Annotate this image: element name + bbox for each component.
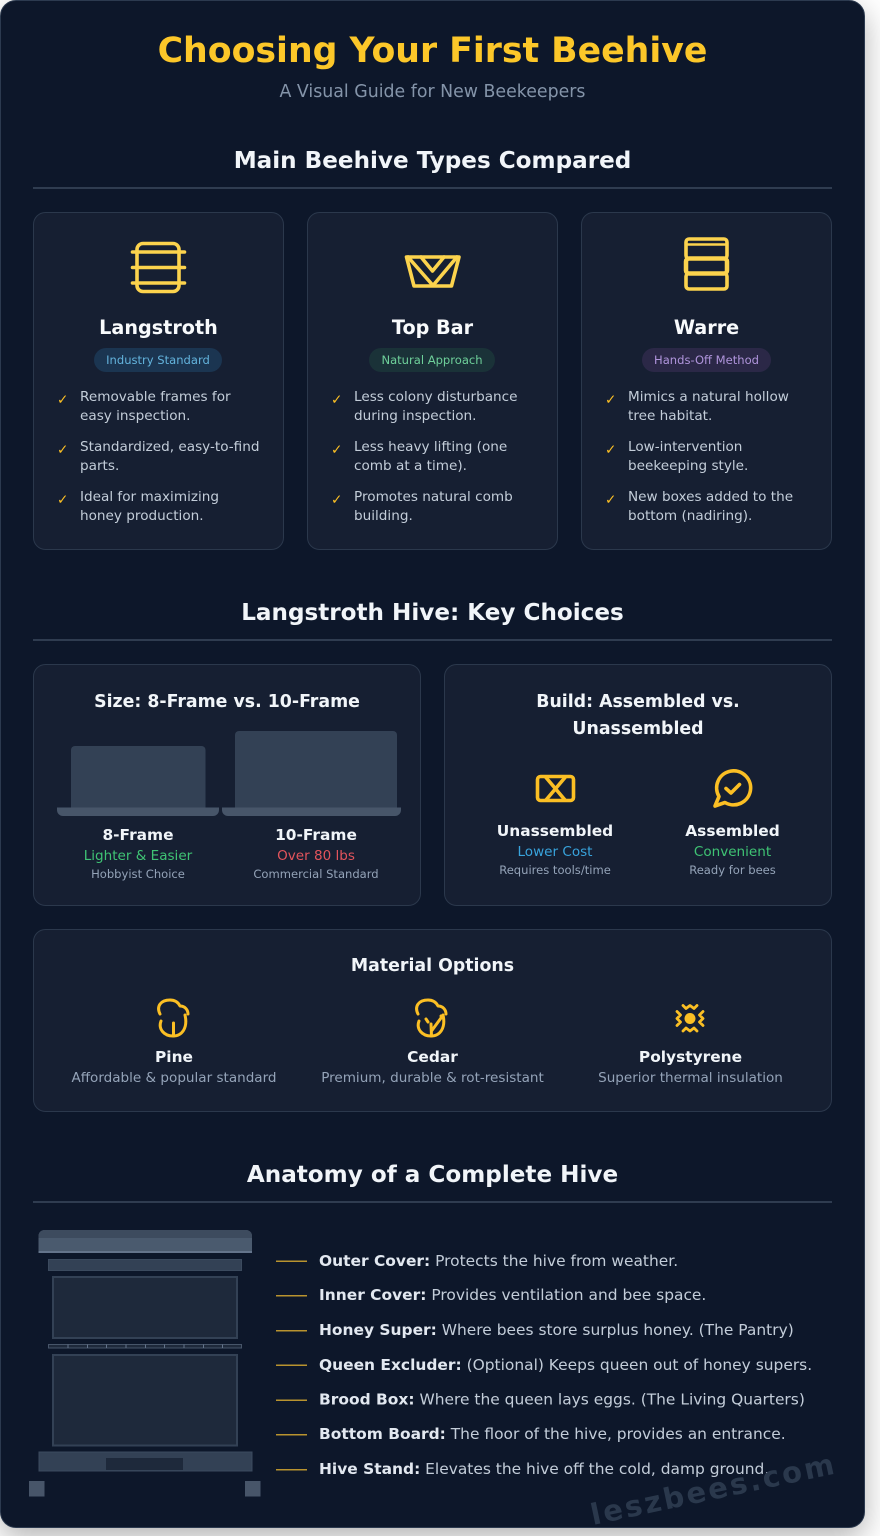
cedar labels: Premium, durable & rot-resistant (321, 1070, 544, 1086)
pine labels: Affordable & popular standard (71, 1070, 277, 1086)
Langstroth bullet list: ✓ (57, 492, 68, 508)
watermark: leszbees.com (587, 1446, 840, 1532)
icon: speech bubble with check (715, 771, 751, 806)
build heading (536, 692, 740, 739)
Warre bullet list: ✓ (605, 442, 616, 458)
Warre bullet list: ✓ (605, 392, 616, 408)
Warre bullet list: beekeeping style. (628, 458, 748, 474)
Top Bar bullet list: ✓ (331, 492, 342, 508)
unassembled labels: Requires tools/time (499, 863, 611, 877)
title: Choosing Your First Beehive (158, 31, 707, 71)
polystyrene labels (598, 1048, 783, 1086)
panel: Warre (582, 212, 832, 550)
honey super (53, 1277, 237, 1338)
diagram: 10-frame box (222, 731, 401, 816)
badge: Hands-Off Method: Hands-Off Method (654, 353, 759, 367)
8-frame labels: Hobbyist Choice (91, 867, 185, 881)
material heading: Material Options (351, 956, 514, 976)
unassembled labels: Lower Cost (517, 844, 593, 860)
assembled labels (685, 822, 780, 877)
Top Bar bullet list: building. (354, 508, 413, 524)
panel: Langstroth (34, 212, 284, 550)
10-frame labels: Commercial Standard (253, 867, 379, 881)
anatomy list (276, 1252, 812, 1478)
Warre bullet list: New boxes added to the (628, 489, 793, 505)
heading: anatomy: Anatomy of a Complete Hive (247, 1162, 618, 1188)
polystyrene labels: Superior thermal insulation (598, 1070, 783, 1086)
Langstroth bullet list: ✓ (57, 392, 68, 408)
Warre bullet list (605, 389, 793, 524)
anatomy list: Bottom Board: The floor of the hive, provides an entrance. (319, 1425, 786, 1443)
size heading: Size: 8-Frame vs. 10-Frame (94, 692, 360, 712)
subtitle: A Visual Guide for New Beekeepers (280, 82, 585, 102)
Warre bullet list: bottom (nadiring). (628, 508, 752, 524)
10-frame labels: 10-Frame (275, 826, 357, 844)
Top Bar bullet list: during inspection. (354, 408, 476, 424)
anatomy list: Brood Box: Where the queen lays eggs. (The Living Quarters) (319, 1390, 805, 1408)
heading: main beehive types: Main Beehive Types Compared (234, 148, 631, 174)
assembled labels: Ready for bees (689, 863, 776, 877)
Langstroth bullet list: ✓ (57, 442, 68, 458)
Top Bar bullet list: ✓ (331, 442, 342, 458)
Top Bar bullet list: Less heavy lifting (one (354, 439, 507, 455)
Top Bar bullet list (331, 389, 517, 524)
Warre bullet list: Mimics a natural hollow (628, 389, 789, 405)
anatomy list: Queen Excluder: (Optional) Keeps queen out of honey supers. (319, 1356, 812, 1374)
badge: Industry Standard: Industry Standard (106, 353, 210, 367)
diagram: 8-frame box (57, 746, 219, 816)
8-frame labels (84, 826, 193, 881)
anatomy list: Honey Super: Where bees store surplus honey. (The Pantry) (319, 1321, 794, 1339)
unassembled labels: Unassembled (497, 822, 613, 840)
diagram: hive anatomy (29, 1230, 260, 1496)
cedar labels (321, 1048, 544, 1086)
panel: material options (34, 930, 832, 1112)
build heading: Unassembled (572, 719, 704, 739)
pine labels: Pine (155, 1048, 193, 1066)
inner cover (48, 1260, 242, 1270)
8-frame labels: Lighter & Easier (84, 848, 193, 864)
icon: flat-pack box (538, 776, 574, 800)
Warre bullet list: Low-intervention (628, 439, 742, 455)
Langstroth bullet list (57, 389, 260, 524)
outer cover (38, 1230, 252, 1253)
assembled labels: Assembled (685, 822, 780, 840)
anatomy list: Inner Cover: Provides ventilation and bee space. (319, 1286, 706, 1304)
panel: Top Bar (308, 212, 558, 550)
panel: size comparison (34, 664, 420, 906)
Langstroth bullet list: Standardized, easy-to-find (80, 439, 260, 455)
Langstroth bullet list: easy inspection. (80, 408, 190, 424)
Langstroth bullet list: honey production. (80, 508, 204, 524)
Top Bar bullet list: Promotes natural comb (354, 489, 513, 505)
icon: cedar tree (417, 1000, 446, 1036)
10-frame labels (253, 826, 379, 881)
queen excluder (48, 1344, 242, 1348)
10-frame labels: Over 80 lbs (277, 848, 355, 864)
heading: Langstroth choices: Langstroth Hive: Key Choices (241, 600, 624, 626)
Warre bullet list: ✓ (605, 492, 616, 508)
Top Bar bullet list: ✓ (331, 392, 342, 408)
badge: Natural Approach: Natural Approach (381, 353, 483, 367)
icon: Langstroth hive (132, 244, 184, 292)
assembled labels: Convenient (694, 844, 771, 860)
badge: Natural Approach (369, 348, 495, 372)
pine labels (71, 1048, 277, 1086)
badge: Hands-Off Method (642, 348, 771, 372)
hive stand (29, 1481, 260, 1496)
unassembled labels (497, 822, 613, 877)
Top Bar bullet list: Less colony disturbance (354, 389, 517, 405)
panel: build choice (444, 664, 832, 906)
8-frame labels: 8-Frame (102, 826, 174, 844)
Warre name: Warre (674, 316, 739, 339)
Langstroth bullet list: parts. (80, 458, 119, 474)
icon: Top Bar hive (406, 257, 459, 286)
anatomy list: Hive Stand: Elevates the hive off the cold, damp ground. (319, 1460, 769, 1478)
build heading: Build: Assembled vs. (536, 692, 740, 712)
bottom board (39, 1452, 252, 1471)
Langstroth name: Langstroth (99, 316, 218, 339)
Warre bullet list: tree habitat. (628, 408, 712, 424)
Top Bar bullet list: comb at a time). (354, 458, 467, 474)
icon: insulation sun (677, 1006, 703, 1031)
Langstroth bullet list: Ideal for maximizing (80, 489, 219, 505)
polystyrene labels: Polystyrene (639, 1048, 742, 1066)
brood box (53, 1355, 237, 1446)
Langstroth bullet list: Removable frames for (80, 389, 231, 405)
badge: Industry Standard (94, 348, 222, 372)
anatomy list: Outer Cover: Protects the hive from weather. (319, 1252, 678, 1270)
cedar labels: Cedar (407, 1048, 458, 1066)
Top Bar name: Top Bar (392, 316, 474, 339)
icon: Warre hive (686, 239, 727, 289)
icon: pine tree (159, 1000, 188, 1036)
